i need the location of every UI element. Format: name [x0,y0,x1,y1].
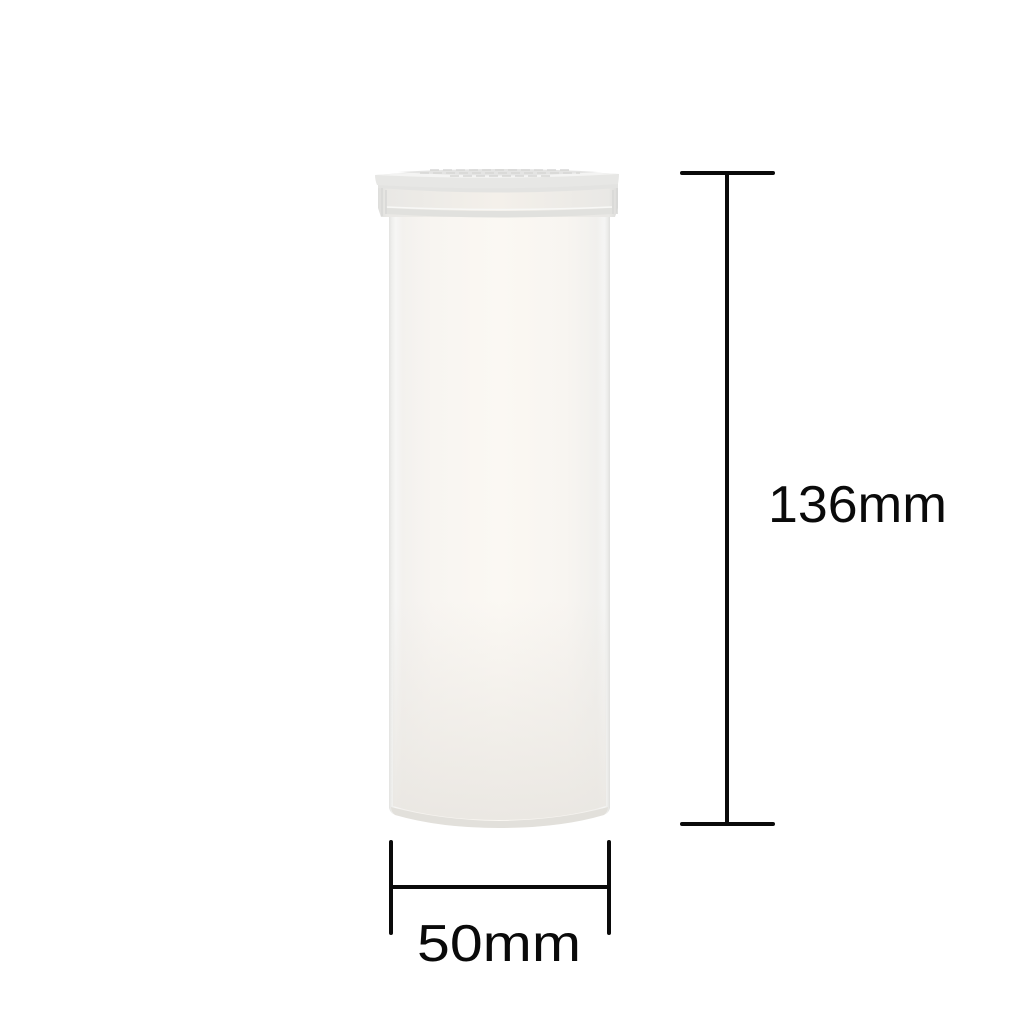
jar base rim [391,807,608,828]
height label: 136mm [768,476,947,534]
width label: 50mm [417,915,581,973]
lid embossed centre [420,170,580,176]
lid band [378,184,618,217]
lid top [375,170,619,188]
lid band grooves [382,188,617,216]
lid band lower ring [386,208,612,218]
width dimension line [391,842,609,933]
jar body [389,205,610,828]
lid band highlight [386,207,612,210]
height dimension line [682,173,773,824]
lid embossed pattern [398,169,598,176]
jar lower tint [393,600,606,820]
lid top highlight [376,170,618,178]
lid band upper shadow [378,182,618,192]
jar [375,169,619,828]
